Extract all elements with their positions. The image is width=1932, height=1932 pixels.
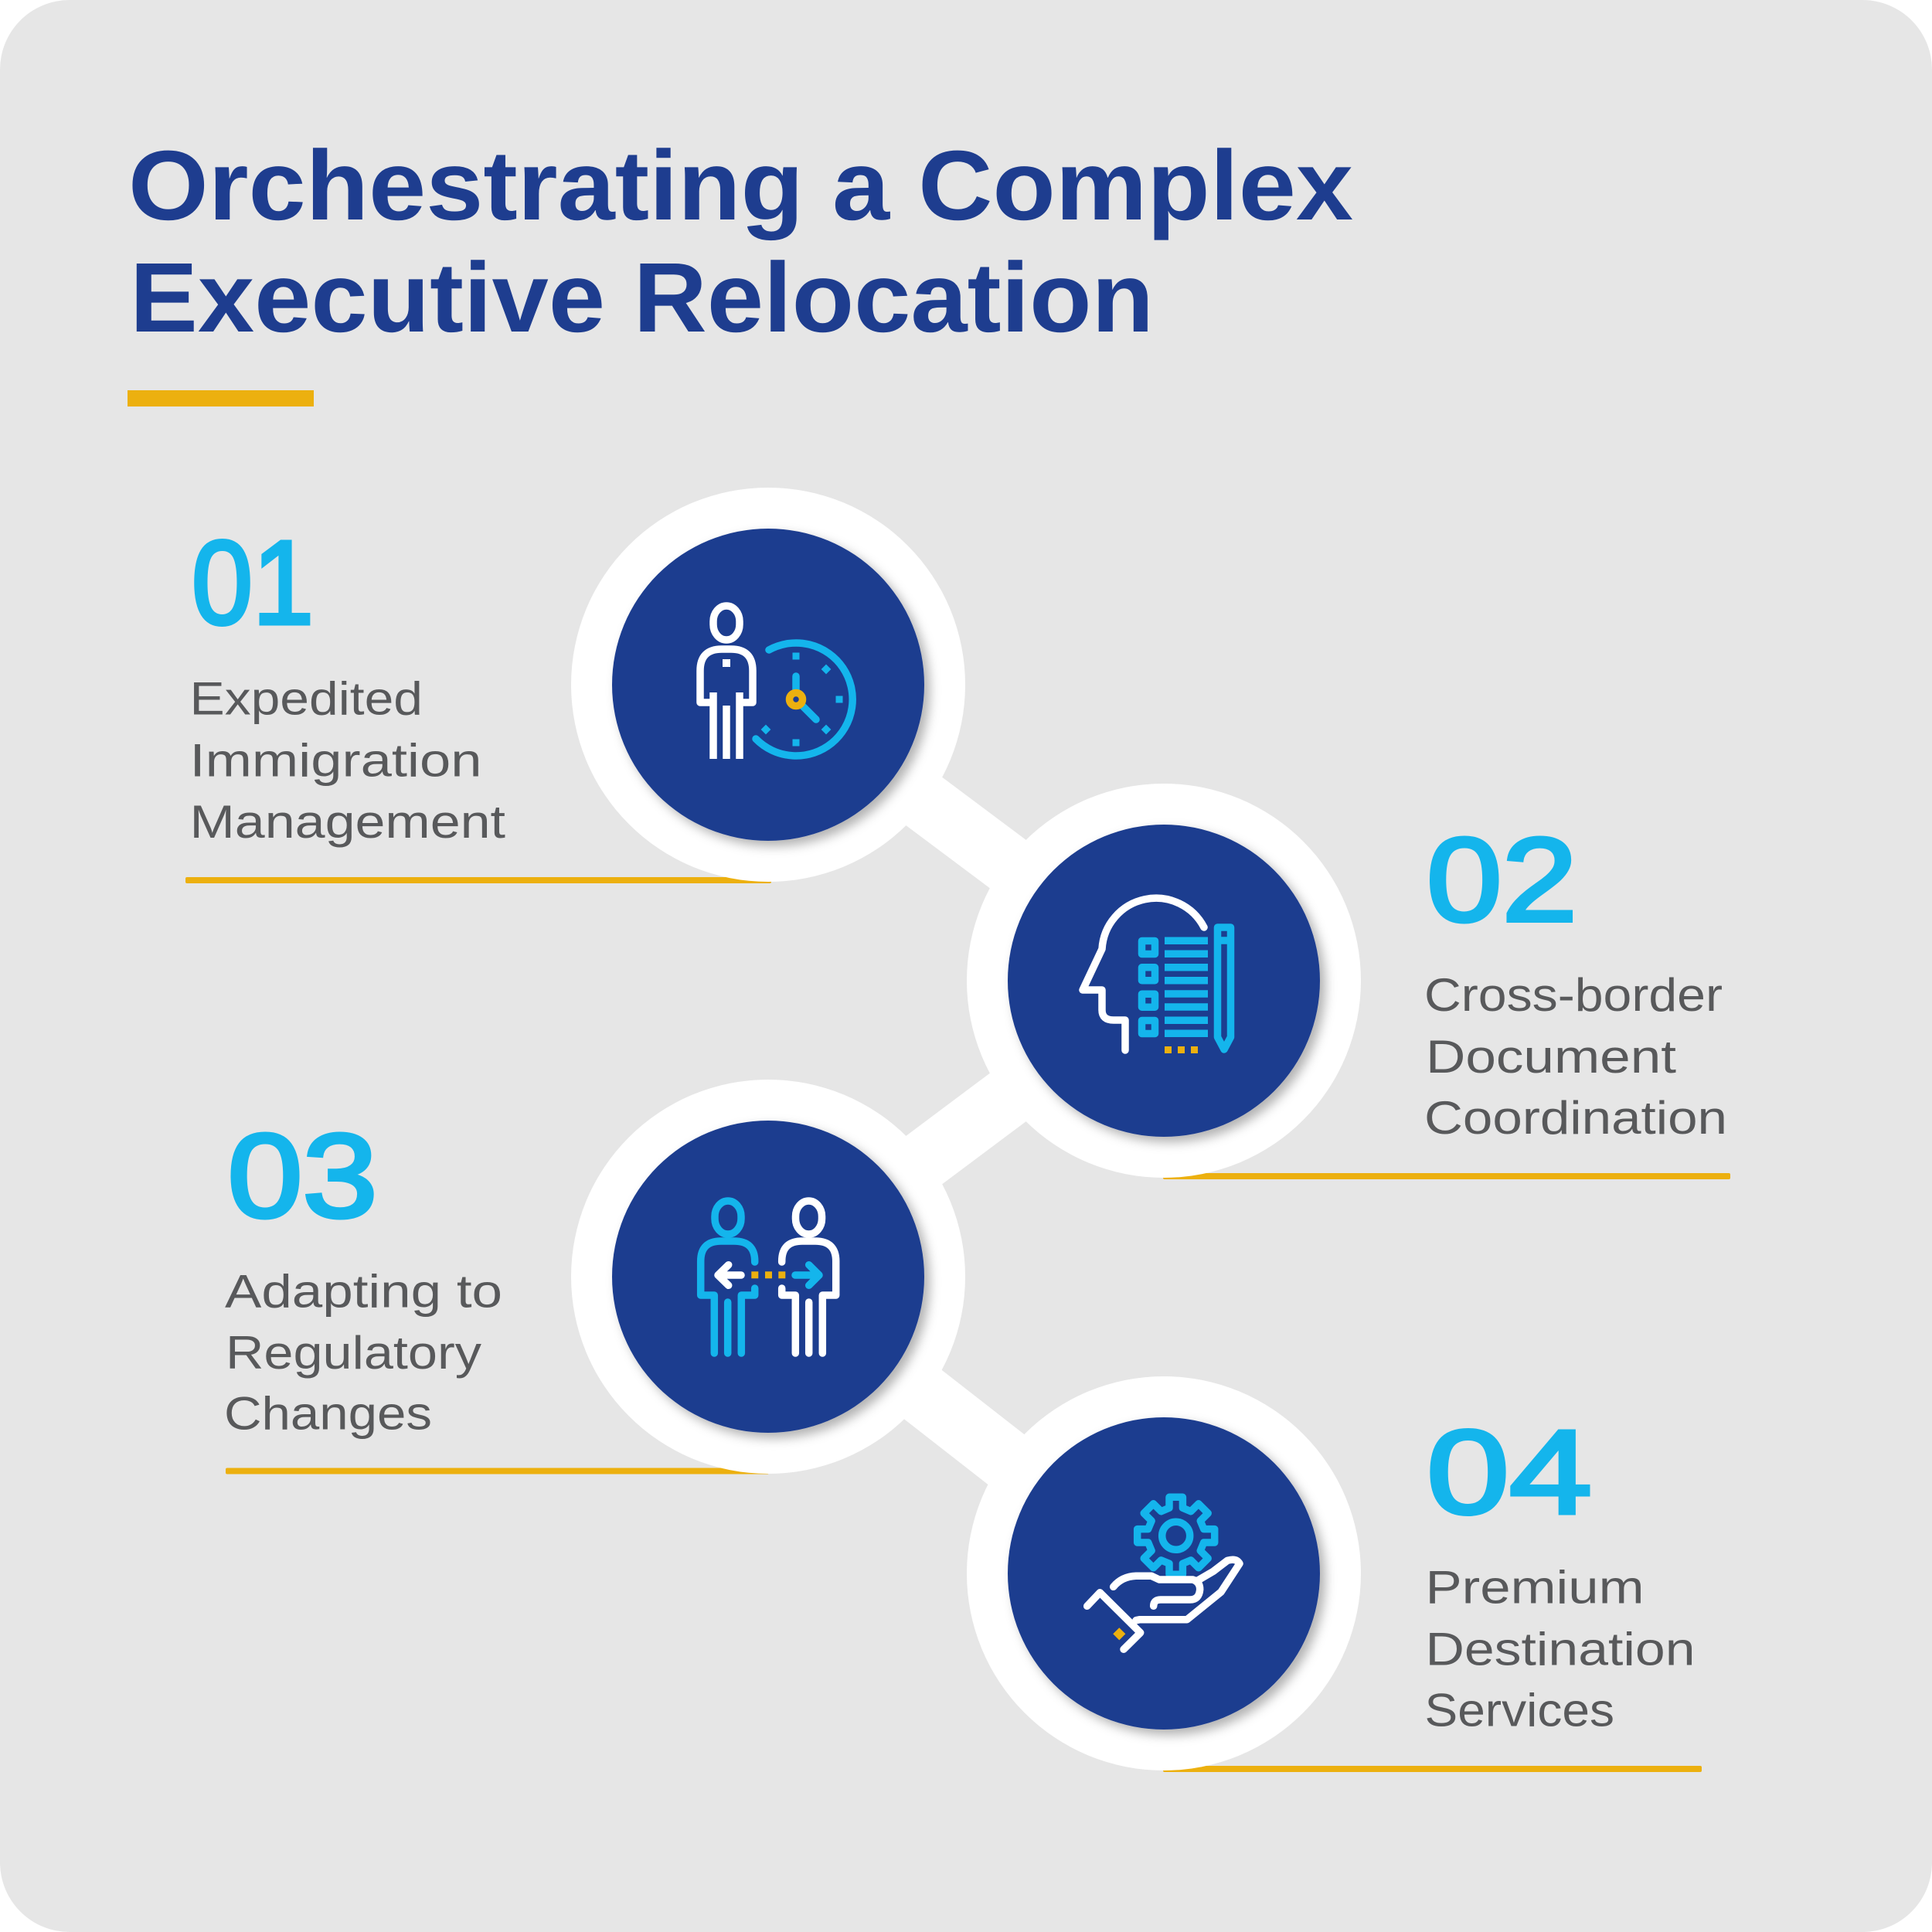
step 02 label: Document [1426,1031,1676,1083]
step 02 label [1424,813,1727,1144]
step 01 circle [612,529,924,841]
title [128,131,1353,353]
step 02 label: 02 [1427,813,1577,946]
step 02 label: Cross-border [1424,969,1723,1021]
title accent bar [128,390,314,406]
step 03 circle [612,1121,924,1433]
step 01 label [190,516,505,848]
step 02 circle [1008,825,1320,1137]
underline: step 02 [1163,1173,1730,1179]
title: Executive Relocation [130,243,1154,353]
step 02 label: Coordination [1424,1092,1727,1144]
step 04 label: 04 [1427,1406,1592,1539]
step 03 label: Changes [224,1387,432,1439]
icon: head with checklist and pencil [1083,898,1230,1053]
step 04 label: Services [1425,1685,1614,1736]
step 03 label [224,1110,502,1439]
title: Orchestrating a Complex [128,131,1353,241]
underline: step 01 [185,877,771,883]
step 03 label: Regulatory [226,1327,481,1379]
step 01 label: Immigration [190,734,482,787]
icon: hand holding gear [1087,1497,1240,1649]
step 04 label [1425,1406,1696,1736]
step 04 label: Premium [1425,1561,1645,1613]
underline: step 04 [1163,1766,1702,1772]
step 03 label: 03 [227,1110,377,1243]
step 04 label: Destination [1425,1623,1696,1675]
step 01 label: Management [190,796,505,848]
white connector path and rings [571,488,1361,1770]
step 01 label: Expedited [190,672,423,725]
step 01 label: 01 [192,516,314,649]
underline: step 03 [226,1468,769,1475]
icon: person with clock [700,606,852,759]
step 03 label: Adapting to [225,1266,502,1318]
step 04 circle [1008,1417,1320,1730]
icon: two people exchanging [701,1201,836,1353]
